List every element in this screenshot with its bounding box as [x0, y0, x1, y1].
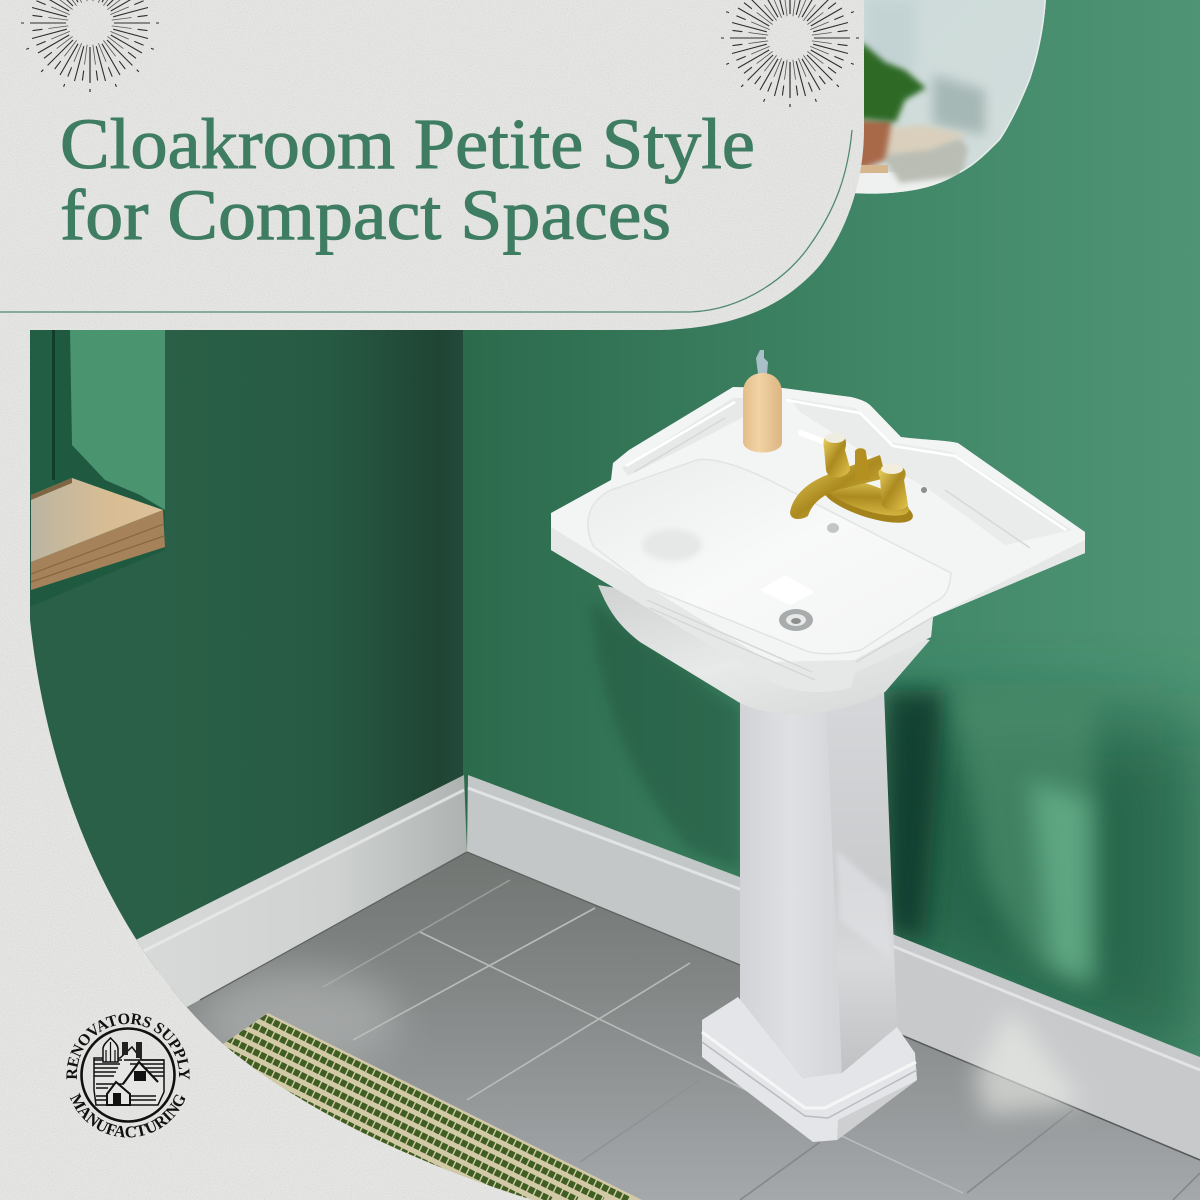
- faucet: [790, 433, 917, 531]
- window sill: [31, 510, 165, 590]
- logo: Renovators Supply Manufacturing: [66, 1013, 190, 1138]
- overflow hole: [827, 523, 839, 533]
- title: Cloakroom Petite Style: [60, 104, 755, 184]
- logo text: MANUFACTURING: [70, 1092, 186, 1138]
- sink wall shadow: [590, 600, 740, 870]
- right baseboard: [880, 929, 1200, 1160]
- sink bowl underside: [598, 585, 930, 714]
- sink rim: [551, 387, 1085, 692]
- pedestal wall shadow: [885, 690, 945, 945]
- pedestal base: [702, 997, 917, 1142]
- logo text: RENOVATORS SUPPLY: [66, 1013, 190, 1080]
- floor tile grout: [323, 880, 1200, 1200]
- title panel: [0, 0, 864, 330]
- mounting pins: [801, 433, 838, 447]
- photo: round mirror: [850, 0, 1047, 194]
- right wall lower shade: [885, 720, 1200, 1080]
- floor: [120, 852, 1200, 1200]
- wall bright patch: [1030, 780, 1090, 985]
- sink: [551, 350, 1085, 714]
- starburst left: [21, 0, 159, 92]
- floor light left: [200, 970, 400, 1070]
- title panel inner line: [0, 130, 852, 312]
- ledge highlight: [626, 400, 1066, 530]
- title: for Compact Spaces: [60, 175, 671, 255]
- title: [60, 104, 755, 255]
- light reflection: [975, 1012, 1085, 1115]
- logo house icon: [94, 1038, 164, 1105]
- soap bottle: [743, 350, 782, 452]
- rear ledge right: [790, 398, 1072, 545]
- rim front face: [551, 527, 1085, 692]
- rear ledge left: [622, 398, 743, 476]
- pedestal column: [740, 690, 897, 1078]
- photo: bathroom scene: [30, 330, 1200, 1200]
- basin bump: [642, 529, 702, 561]
- wall light patch: [955, 695, 1095, 985]
- drain: [779, 609, 813, 631]
- right baseboard behind pedestal: [467, 775, 745, 967]
- right wall: [462, 330, 1200, 1110]
- rug with stripes: [224, 1013, 642, 1200]
- window recess: [30, 330, 165, 607]
- left baseboard: [136, 775, 467, 1007]
- starburst right: [721, 0, 859, 107]
- basin: [588, 460, 951, 654]
- photo: upper right wall: [462, 0, 1200, 340]
- basin soft highlight: [774, 582, 814, 604]
- logo ring: [82, 1028, 174, 1122]
- logo text: [66, 1013, 190, 1138]
- rim moulding lines: [647, 600, 933, 680]
- left wall: [30, 330, 463, 970]
